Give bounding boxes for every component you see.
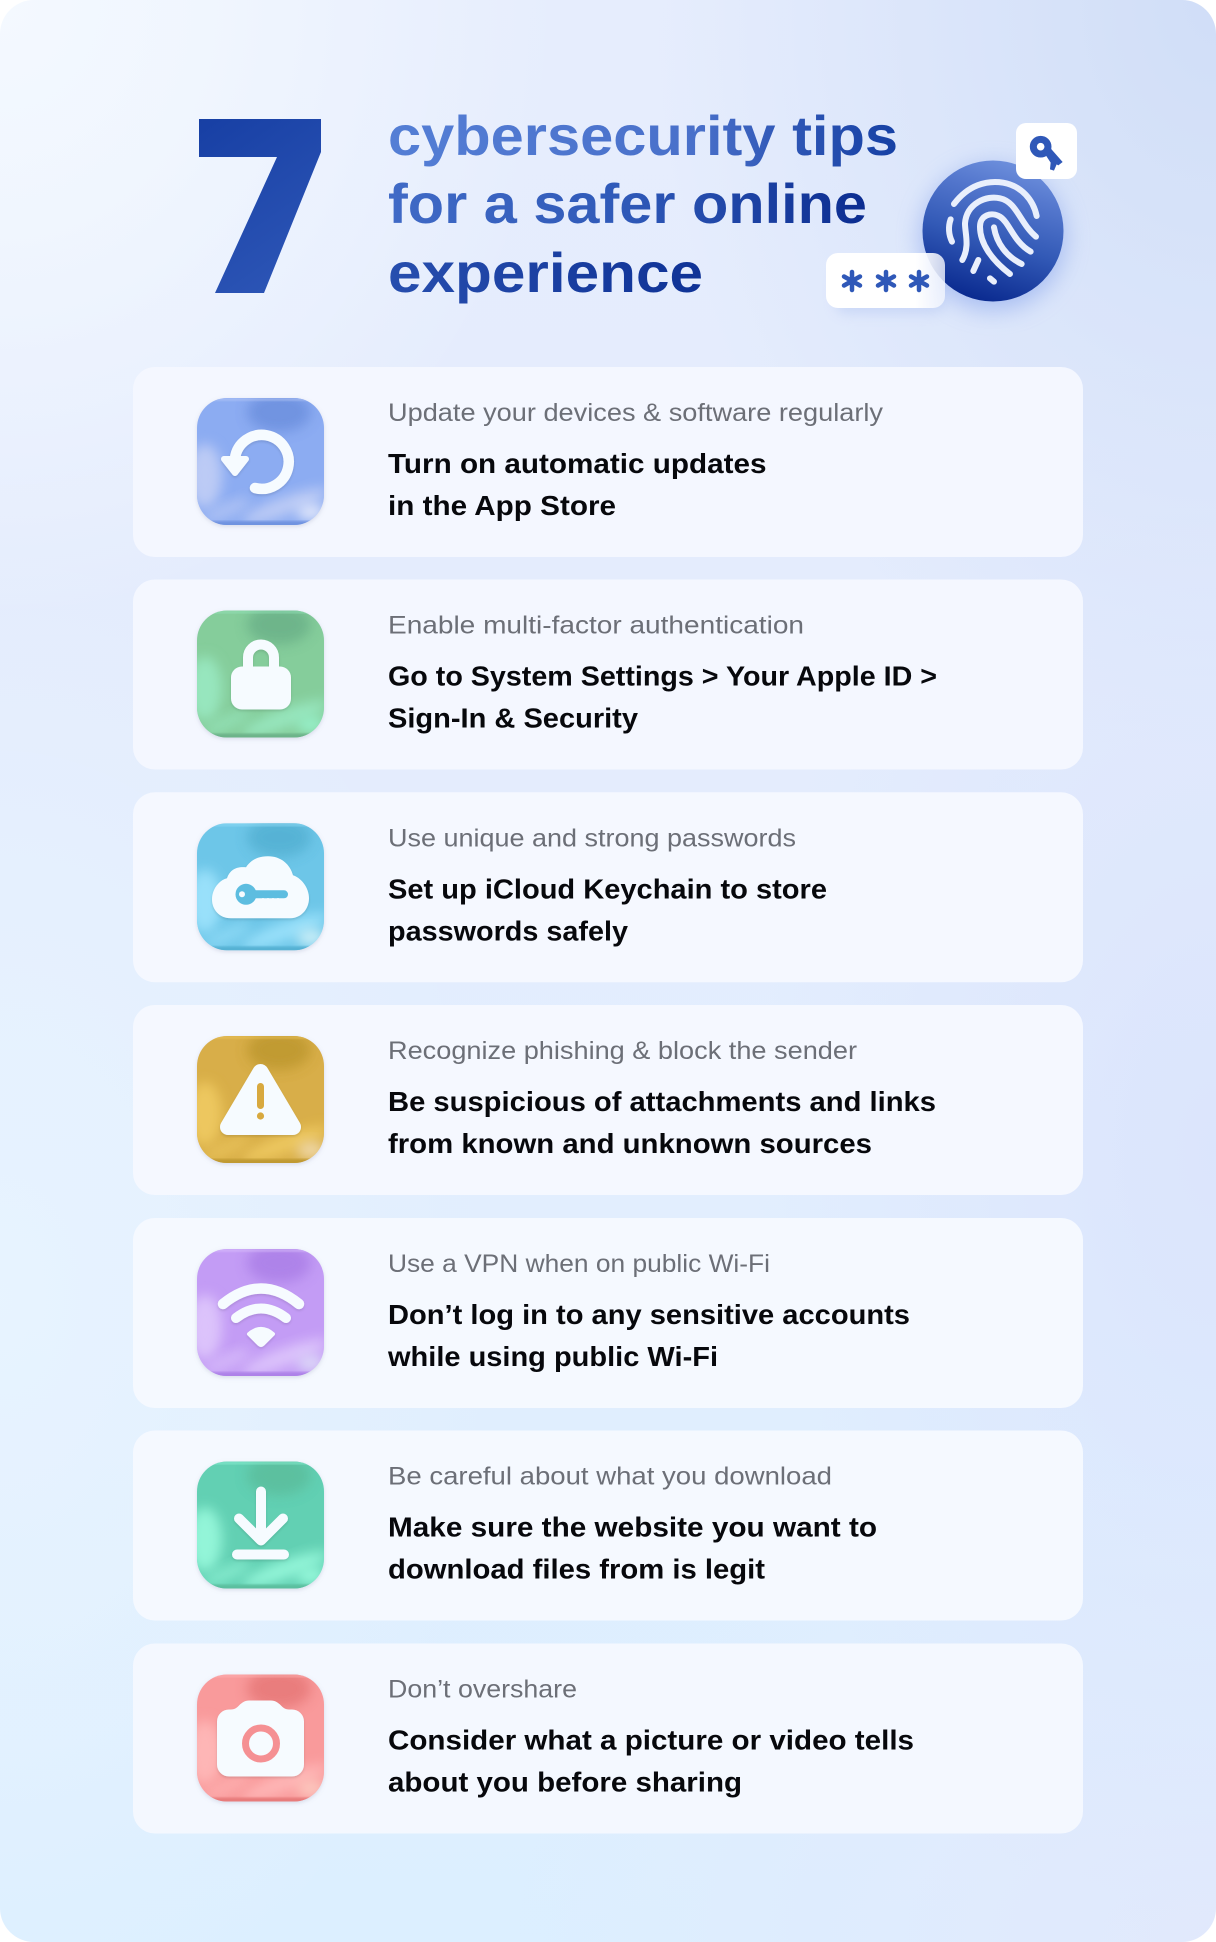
text <box>388 612 937 734</box>
key glyph <box>236 884 288 905</box>
text: Enable multi-factor authentication <box>388 612 804 640</box>
panel: tip 2 multi-factor <box>133 580 1083 770</box>
icon: fingerprint badge <box>826 123 1077 314</box>
text <box>388 1676 914 1798</box>
panel: tip 1 update <box>133 367 1083 557</box>
text: Turn on automatic updates <box>388 448 766 479</box>
header <box>199 104 1077 314</box>
text <box>388 399 884 521</box>
title: for a safer online <box>388 172 867 235</box>
text: Be suspicious of attachments and links <box>388 1086 936 1117</box>
big number 7 <box>199 119 321 293</box>
text: Use a VPN when on public Wi-Fi <box>388 1250 770 1278</box>
key card <box>1016 123 1077 179</box>
text: Be careful about what you download <box>388 1462 832 1490</box>
title: cybersecurity tips <box>388 104 898 167</box>
text: Make sure the website you want to <box>388 1512 877 1542</box>
text: Set up iCloud Keychain to store <box>388 873 827 904</box>
panel: tip 5 vpn <box>133 1218 1083 1408</box>
panel: tip 6 download <box>133 1430 1083 1620</box>
panel: tip 3 passwords <box>133 792 1083 982</box>
text: about you before sharing <box>388 1766 742 1798</box>
text: Sign-In & Security <box>388 702 639 734</box>
text: from known and unknown sources <box>388 1128 872 1159</box>
title: experience <box>388 241 703 304</box>
text <box>388 1462 877 1584</box>
text: Don’t overshare <box>388 1676 577 1704</box>
panel: tip 4 phishing <box>133 1005 1083 1195</box>
text: passwords safely <box>388 915 629 946</box>
text: Go to System Settings > Your Apple ID > <box>388 660 937 692</box>
icon: warning <box>188 1030 331 1168</box>
text <box>388 1037 936 1159</box>
text: Don’t log in to any sensitive accounts <box>388 1299 910 1330</box>
text: download files from is legit <box>388 1554 765 1584</box>
icon: download <box>188 1456 331 1594</box>
text <box>388 824 827 946</box>
text: Recognize phishing & block the sender <box>388 1037 857 1065</box>
title <box>388 104 898 304</box>
icon: wifi <box>188 1243 331 1381</box>
text: Consider what a picture or video tells <box>388 1724 914 1756</box>
icon: camera <box>188 1668 331 1807</box>
text: in the App Store <box>388 490 616 521</box>
text <box>387 1250 910 1372</box>
text: Update your devices & software regularly <box>388 399 884 427</box>
password card <box>826 253 945 308</box>
icon: lock <box>188 604 331 743</box>
text: Use unique and strong passwords <box>388 824 796 852</box>
icon: refresh <box>188 392 331 530</box>
panel: tip 7 overshare <box>133 1644 1083 1834</box>
icon: cloud key <box>188 817 331 955</box>
text: while using public Wi-Fi <box>387 1341 718 1372</box>
